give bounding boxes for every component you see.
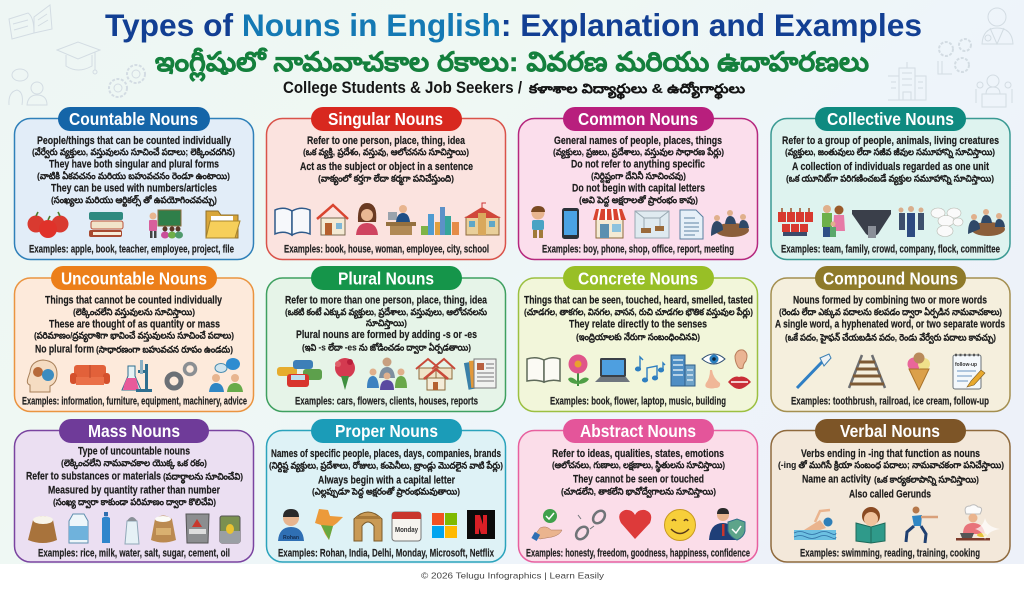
icon: Monday calendar: Monday [395,527,418,534]
icon: people giving advice [209,358,243,392]
icon: meeting [711,210,749,237]
heading: mass nouns: Mass Nouns [88,421,180,441]
text: singular explanation: (ఒక వ్యక్తి, ప్రదేశం, వస్తువు, ఆలోచనను సూచిస్తాయి) [303,146,469,159]
icon: oil can [220,516,240,543]
icon: toothbrush [797,354,831,388]
text: mass explanation [26,446,243,509]
footer: © 2026 Telugu Infographics | Learn Easily [421,570,605,580]
icon: company [898,206,924,237]
text: singular explanation: (వాక్యంలో కర్తగా లేదా కర్మగా పనిచేస్తుంది) [318,172,454,186]
icon: follow-up notepad: follow-up [955,362,978,368]
icon: committee [968,209,1005,236]
icon: confident man with shield [709,508,745,540]
heading: common nouns: Common Nouns [578,109,698,129]
icon: ice cream [908,352,930,390]
text: uncountable explanation: (సాధారణంగా బహువచన రూపం ఉండదు) [96,344,233,354]
icon: school [464,203,501,235]
heading: abstract nouns: Abstract Nouns [580,421,696,441]
icon: reading [856,507,885,543]
heading: proper nouns: Proper Nouns [335,421,438,441]
heading: uncountable nouns: Uncountable Nouns [61,268,207,288]
icon: heart [619,510,651,539]
text: common explanation: (అవి పెద్ద అక్షరాలతో ప్రారంభం కావు) [579,194,698,207]
text: common explanation: (నిర్దిష్టంగా దేనినీ సూచించవు) [591,170,686,183]
text: collective explanation: (వ్యక్తులు, జంతువులు లేదా సజీవ జీవుల సమూహాన్ని సూచిస్తాయి) [785,147,995,159]
text: verbal explanation: Also called Gerunds [849,488,931,500]
icon: crowd [852,210,891,238]
panel: proper nouns [266,419,506,562]
header background icons [9,5,1013,107]
text: uncountable explanation: Things that cannot be counted individually [45,294,223,306]
text: concrete explanation: They relate directly to the senses [569,318,707,330]
icon: shop [593,209,626,238]
heading: proper nouns [311,419,462,443]
icon: cooking chef [956,505,990,540]
text: proper explanation: Names of specific people, places, days, companies, brands [271,448,501,460]
text: collective explanation: (ఒక యూనిట్‌గా పరిగణించబడే వ్యక్తుల సమూహాన్ని సూచిస్తాయి) [786,174,994,186]
text: singular explanation: Act as the subject or object in a sentence [300,161,473,173]
icon: rice sack [28,516,57,543]
text: abstract explanation: (ఆలోచనలు, గుణాలు, లక్షణాలు, స్థితులను సూచిస్తాయి) [552,459,725,473]
text: countable explanation: They can be used with numbers/articles [51,182,217,194]
text: concrete explanation: (చూడగల, తాకగల, వినగల, వాసన, రుచి చూడగల భౌతిక వస్తువుల పేర్లు) [524,307,753,319]
panel: compound nouns [771,266,1010,412]
panel: common nouns [518,107,758,260]
text: verbal explanation: (ఒక కార్యకలాపాన్ని సూచిస్తాయి) [874,474,979,486]
text: concrete explanation [524,294,753,343]
icon: ear [735,350,747,369]
text: compound explanation: (రెండు లేదా ఎక్కువ పదాలను కలపడం ద్వారా ఏర్పడిన నామవాచకాలు) [779,307,1002,319]
text: singular explanation [300,135,473,186]
text: countable explanation: People/things that can be counted individually [37,135,232,147]
icon: sugar sack [151,516,176,542]
icon: nose [705,370,720,388]
icon: water bottle [102,512,110,543]
text: proper examples: Examples: Rohan, India, Delhi, Monday, Microsoft, Netflix [278,548,494,560]
icon: swimming [794,510,836,540]
text: plural explanation: సూచిస్తాయి) [366,318,407,330]
icon: laptop [595,358,630,382]
icon: Netflix logo [467,510,495,539]
text: uncountable explanation: These are thought of as quantity or mass [49,318,220,330]
text: common explanation: (వ్యక్తులు, ప్రజలు, ప్రదేశాలు, వస్తువుల సాధారణ పేర్లు) [553,147,724,159]
icon: Rohan: Rohan [283,535,299,541]
heading: verbal nouns [815,419,966,443]
text: common examples: Examples: boy, phone, shop, office, report, meeting [542,244,734,256]
icon: milk carton [69,514,88,543]
audience line: కళాశాల విద్యార్థులు & ఉద్యోగార్థులు [528,81,746,100]
title: Types of Nouns in English: Explanation and Examples [105,7,922,43]
icon: eye [702,354,725,364]
icon: hand with check [531,509,562,541]
heading: compound nouns: Compound Nouns [823,268,958,288]
heading: singular nouns: Singular Nouns [328,109,443,129]
icon: house [317,205,348,235]
text: uncountable explanation [34,294,234,356]
icon: flock [931,208,963,236]
audience line [283,79,746,100]
text: plural examples: Examples: cars, flowers, clients, houses, reports [295,396,478,408]
icon: apples [28,212,68,238]
text: mass explanation: (లెక్కించలేని నామవాచకాల యొక్క ఒక రకం) [61,458,207,470]
panel: singular nouns [266,107,506,260]
icon: team [778,208,813,236]
text: mass explanation: Type of uncountable nouns [78,446,190,458]
panel: concrete nouns [518,266,758,412]
text: compound explanation: (ఒకే పదం, హైఫన్ చేయబడిన పదం, రెండు వేర్వేరు పదాలు కావచ్చు) [785,332,996,344]
icon: broken chain [574,508,607,542]
text: countable explanation [32,135,235,207]
text: concrete explanation: Things that can be seen, touched, heard, smelled, tasted [524,294,753,306]
icon: books [89,212,123,237]
text: countable explanation: They have both singular and plural forms [49,158,219,170]
text: plural explanation [285,294,488,354]
text: proper explanation [269,448,503,498]
text: abstract examples: Examples: honesty, freedom, goodness, happiness, confidence [526,548,750,560]
text: mass explanation: Measured by quantity rather than number [48,484,220,496]
text: mass examples: Examples: rice, milk, water, salt, sugar, cement, oil [38,548,230,560]
icon: smile [664,510,696,540]
text: concrete examples: Examples: book, flower, laptop, music, building [550,396,726,408]
panel: uncountable nouns [14,266,254,412]
text: mass explanation: (సంఖ్య ద్వారా కాకుండా పరిమాణం ద్వారా కొలిచేవి) [53,497,216,509]
icon: office [635,211,669,238]
text: compound explanation [775,294,1005,344]
icon: building [671,355,695,386]
text: verbal explanation [778,448,1004,500]
icon: boy [531,206,545,238]
icon: salt shaker [125,517,139,544]
icon: Monday calendar [392,512,421,541]
icon: employee at desk [386,205,416,235]
icon: India map [315,509,343,540]
text: verbal explanation: (-ing తో ముగిసే క్రియా సంబంధ పదాలు; నామవాచకంగా పనిచేస్తాయి) [778,459,1004,472]
text: proper explanation: Always begin with a capital letter [318,474,455,486]
text: abstract explanation [552,448,725,498]
icon: flowers [335,358,355,390]
text: proper explanation: (ఎల్లప్పుడూ పెద్ద అక్షరంతో ప్రారంభమవుతాయి) [312,486,460,498]
text: collective explanation [782,135,999,186]
text: proper explanation: (నిర్దిష్ట వ్యక్తులు, ప్రదేశాలు, రోజులు, కంపెనీలు, బ్రాండ్లు మొదలైన వాటి పేర్లు) [269,460,503,473]
panel: collective nouns [771,107,1010,260]
icon: teacher [149,210,183,238]
heading: mass nouns [59,419,209,443]
text: countable examples: Examples: apple, book, teacher, employee, project, file [29,244,234,256]
icon: railroad [849,355,885,388]
icon: phone [562,208,579,239]
icon: Microsoft logo [432,513,457,538]
heading: concrete nouns: Concrete Nouns [578,268,698,288]
heading: plural nouns [311,266,462,290]
text: abstract explanation: Refer to ideas, qualities, states, emotions [552,448,724,460]
heading: countable nouns: Countable Nouns [69,109,198,129]
icon: reports [464,359,496,390]
text: verbal explanation: Name an activity [802,474,872,486]
text: singular explanation: Refer to one person, place, thing, idea [307,135,466,147]
heading: collective nouns: Collective Nouns [827,109,954,129]
text: common explanation [553,135,724,207]
telugu subtitle: ఇంగ్లీషులో నామవాచకాల రకాలు: వివరణ మరియు ఉదాహరణలు [155,47,869,82]
icon: lab equipment [122,360,152,392]
text: countable explanation: (వాటికి ఏకవచనం మరియు బహువచనం రెండూ ఉంటాయి) [37,171,230,181]
panel: mass nouns [14,419,254,562]
icon: sparkle watermark [975,518,1000,540]
text: common explanation: Do not refer to anything specific [571,158,705,170]
audience line: College Students & Job Seekers / [283,79,522,97]
icon: head with gears [27,360,57,392]
text: abstract explanation: They cannot be seen or touched [573,474,704,486]
icon: family [822,205,845,237]
icon: music [635,357,665,382]
text: countable explanation: (సంఖ్యలు మరియు ఆర్టికల్స్ తో ఉపయోగించవచ్చు) [51,194,217,207]
text: plural explanation: (ఇవి -s లేదా -es ను జోడించడం ద్వారా ఏర్పడతాయి) [302,342,471,354]
icon: training runner [906,506,938,543]
text: common explanation: Do not begin with capital letters [572,182,705,194]
heading: verbal nouns: Verbal Nouns [840,421,940,441]
text: mass explanation: (పదార్థాలను సూచించేవి) [163,472,243,484]
text: common explanation: General names of people, places, things [554,135,722,147]
icon: book [527,358,560,382]
text: uncountable examples: Examples: information, furniture, equipment, machinery, advice [22,396,247,408]
icon: houses [416,359,455,390]
icon: cement bag [186,514,209,543]
icon: flower [568,354,589,386]
heading: plural nouns: Plural Nouns [338,268,434,288]
icon: clients [367,358,407,390]
icon: woman [356,203,378,235]
icon: follow-up notepad [953,355,985,389]
icon: sofa [70,365,110,385]
icon: machinery gears [167,364,196,388]
icon: folder [206,211,240,238]
icon: report [680,210,703,239]
text: plural explanation: (ఒకటి కంటే ఎక్కువ వ్యక్తులు, ప్రదేశాలు, వస్తువులు, ఆలోచనలను [285,306,488,319]
text: plural explanation: Plural nouns are formed by adding -s or -es [296,329,477,341]
text: concrete explanation: (ఇంద్రియాలకు నేరుగా సంబంధించినవి) [576,332,700,343]
panel: abstract nouns [518,419,758,562]
icon: cars [277,360,322,387]
text: mass explanation: Refer to substances or materials [26,470,161,482]
icon: open book [275,208,310,235]
panel: plural nouns [266,266,506,412]
panel: countable nouns [14,107,254,260]
icon: India Gate [354,512,382,541]
text: abstract explanation: (చూడలేని, తాకలేని భావోద్వేగాలను సూచిస్తాయి) [561,486,716,498]
text: plural explanation: Refer to more than one person, place, thing, idea [285,294,488,306]
icon: city [421,207,459,235]
icon: lips [728,377,751,389]
text: singular examples: Examples: book, house, woman, employee, city, school [284,244,489,256]
text: uncountable explanation: (లెక్కించలేని వస్తువులను సూచిస్తాయి) [73,307,195,319]
text: countable explanation: (వేర్వేరు వ్యక్తులు, వస్తువులను సూచించే పదాలు; లెక్కించదగిన) [32,147,235,159]
icon: Rohan [278,509,304,541]
panel: verbal nouns [771,419,1010,562]
text: uncountable explanation: (పరిమాణం/ద్రవ్యరాశిగా భావించే వస్తువులను సూచించే పదాలు) [34,330,234,342]
text: uncountable explanation: No plural form [35,344,94,356]
